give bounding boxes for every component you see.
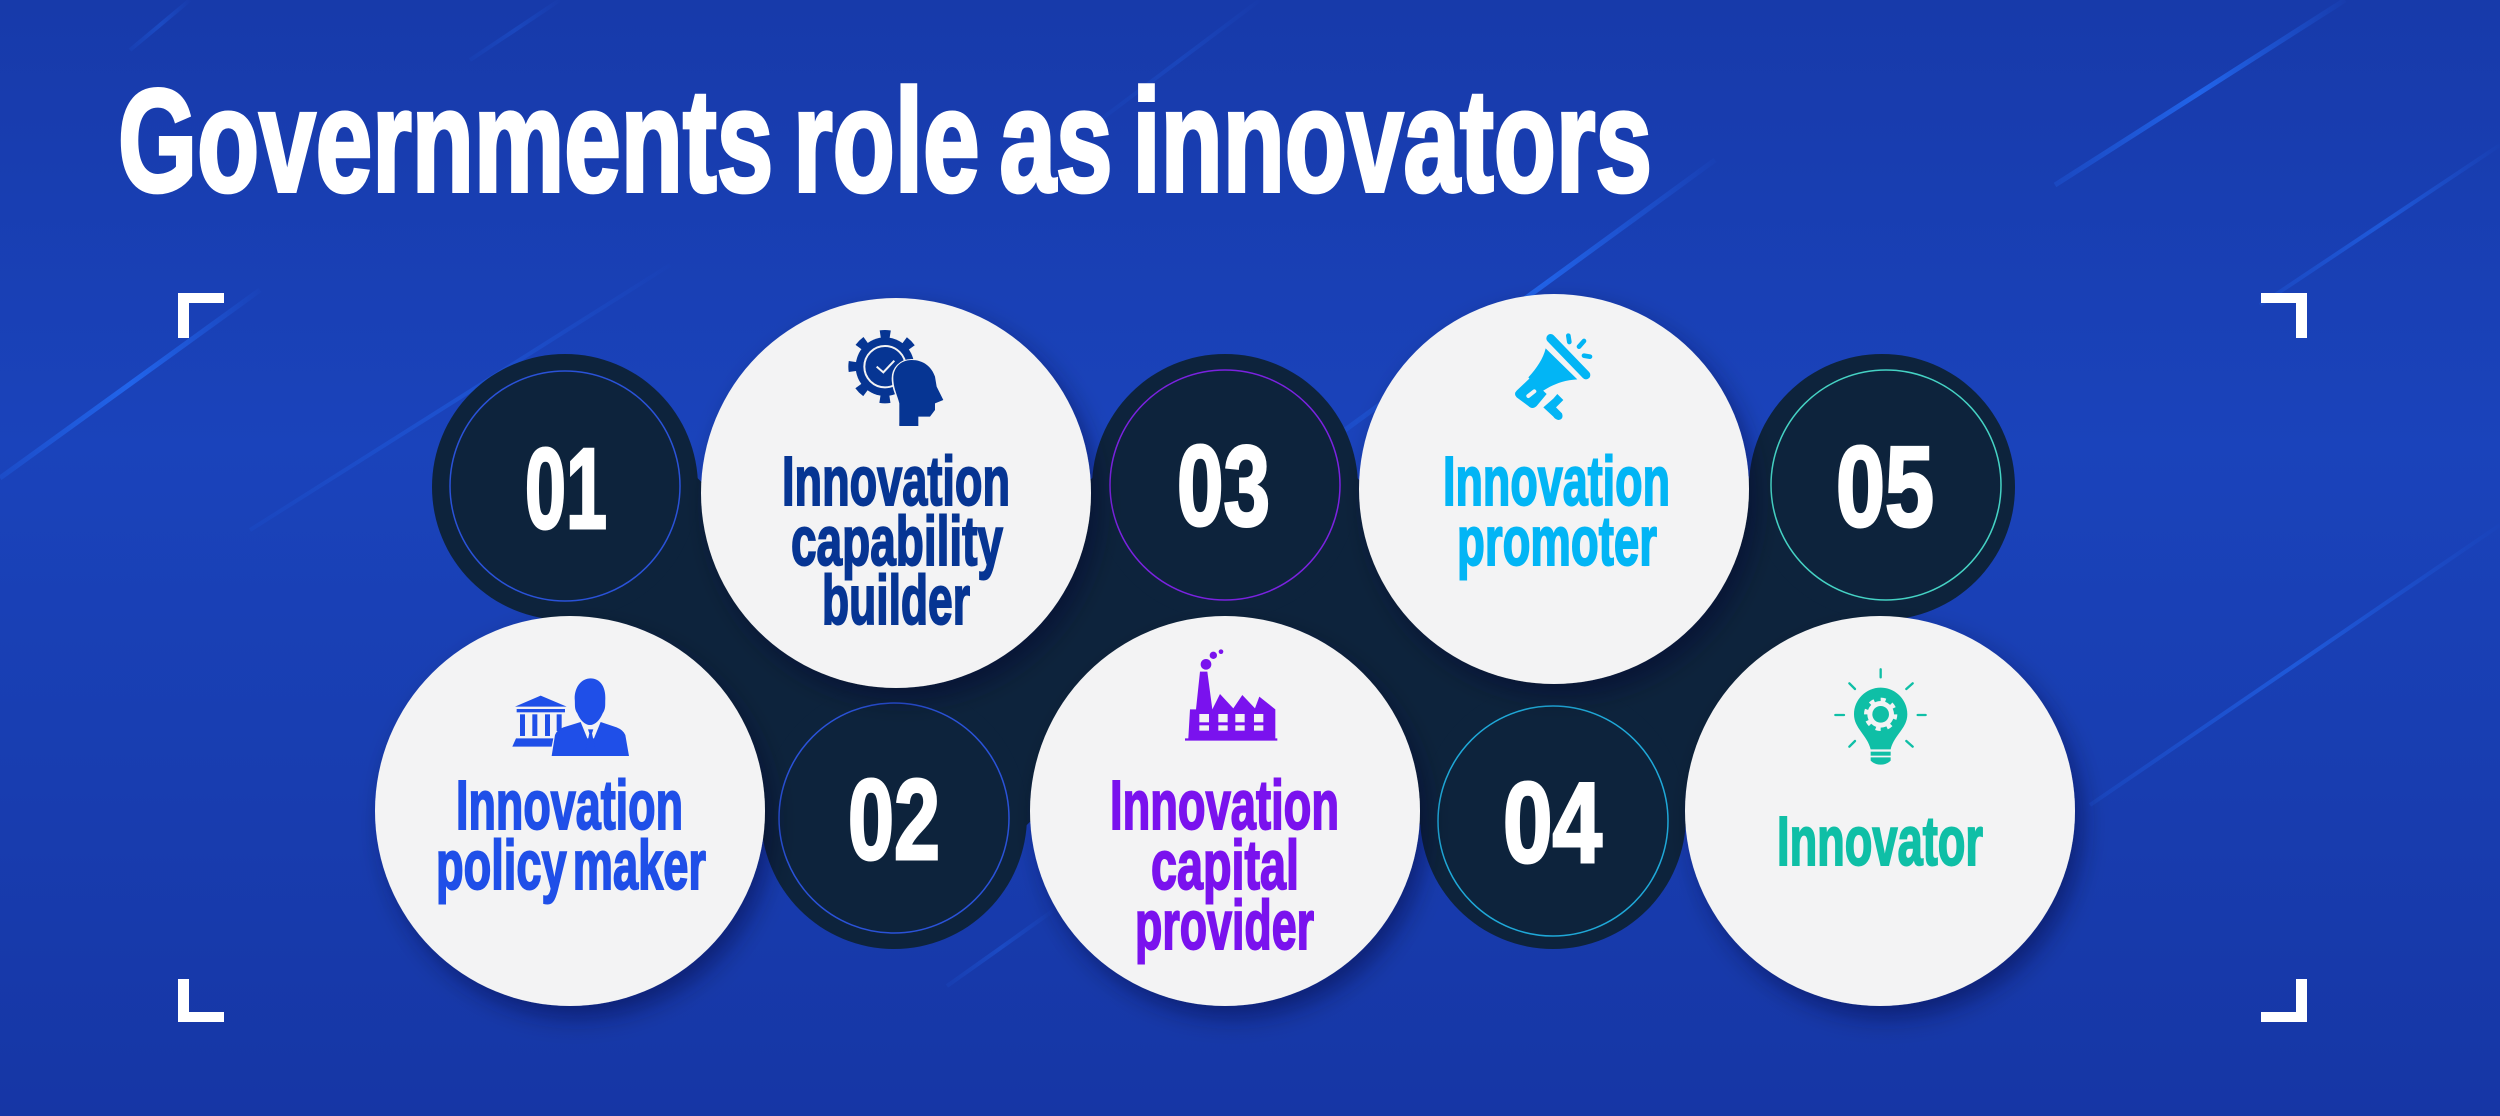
label [436, 766, 706, 904]
number 02 [779, 703, 1009, 933]
number 03: 03 [1177, 423, 1270, 550]
icon: light bulb with gear [1835, 669, 1926, 765]
label: provider [1135, 886, 1314, 964]
panel: innovator [1685, 616, 2075, 1006]
dark serpentine connector [432, 354, 2015, 949]
icon: factory [1185, 649, 1277, 741]
label [1443, 442, 1670, 580]
number 02: 02 [848, 757, 940, 884]
label: promoter [1457, 502, 1657, 580]
number 05: 05 [1836, 424, 1934, 551]
number 01 [450, 371, 680, 601]
label: Innovation [1110, 766, 1339, 844]
label: capital [1151, 826, 1299, 904]
label: Innovation [456, 766, 683, 844]
label: builder [822, 561, 970, 639]
panel: innovation policy maker [375, 616, 765, 1006]
number 04: 04 [1503, 760, 1602, 887]
title: Governments role as innovators [118, 59, 1652, 222]
label [782, 442, 1010, 639]
label: Innovation [1443, 442, 1670, 520]
label: capability [791, 502, 1003, 580]
icon: building and businessman [512, 678, 629, 756]
number 03 [1110, 370, 1340, 600]
panel: innovation capital provider [1030, 616, 1420, 1006]
panel: innovation promoter [1359, 294, 1749, 684]
icon: gear and head [853, 335, 943, 426]
panel: innovation capability builder [701, 298, 1091, 688]
number 05 [1771, 370, 2001, 600]
number 01: 01 [525, 426, 607, 553]
number 04 [1438, 706, 1668, 936]
label [1110, 766, 1339, 964]
corner brackets [178, 293, 2307, 1022]
label: Innovation [782, 442, 1010, 520]
label: policy maker [436, 826, 706, 904]
icon: megaphone [1515, 336, 1590, 420]
label: Innovator [1777, 802, 1983, 880]
